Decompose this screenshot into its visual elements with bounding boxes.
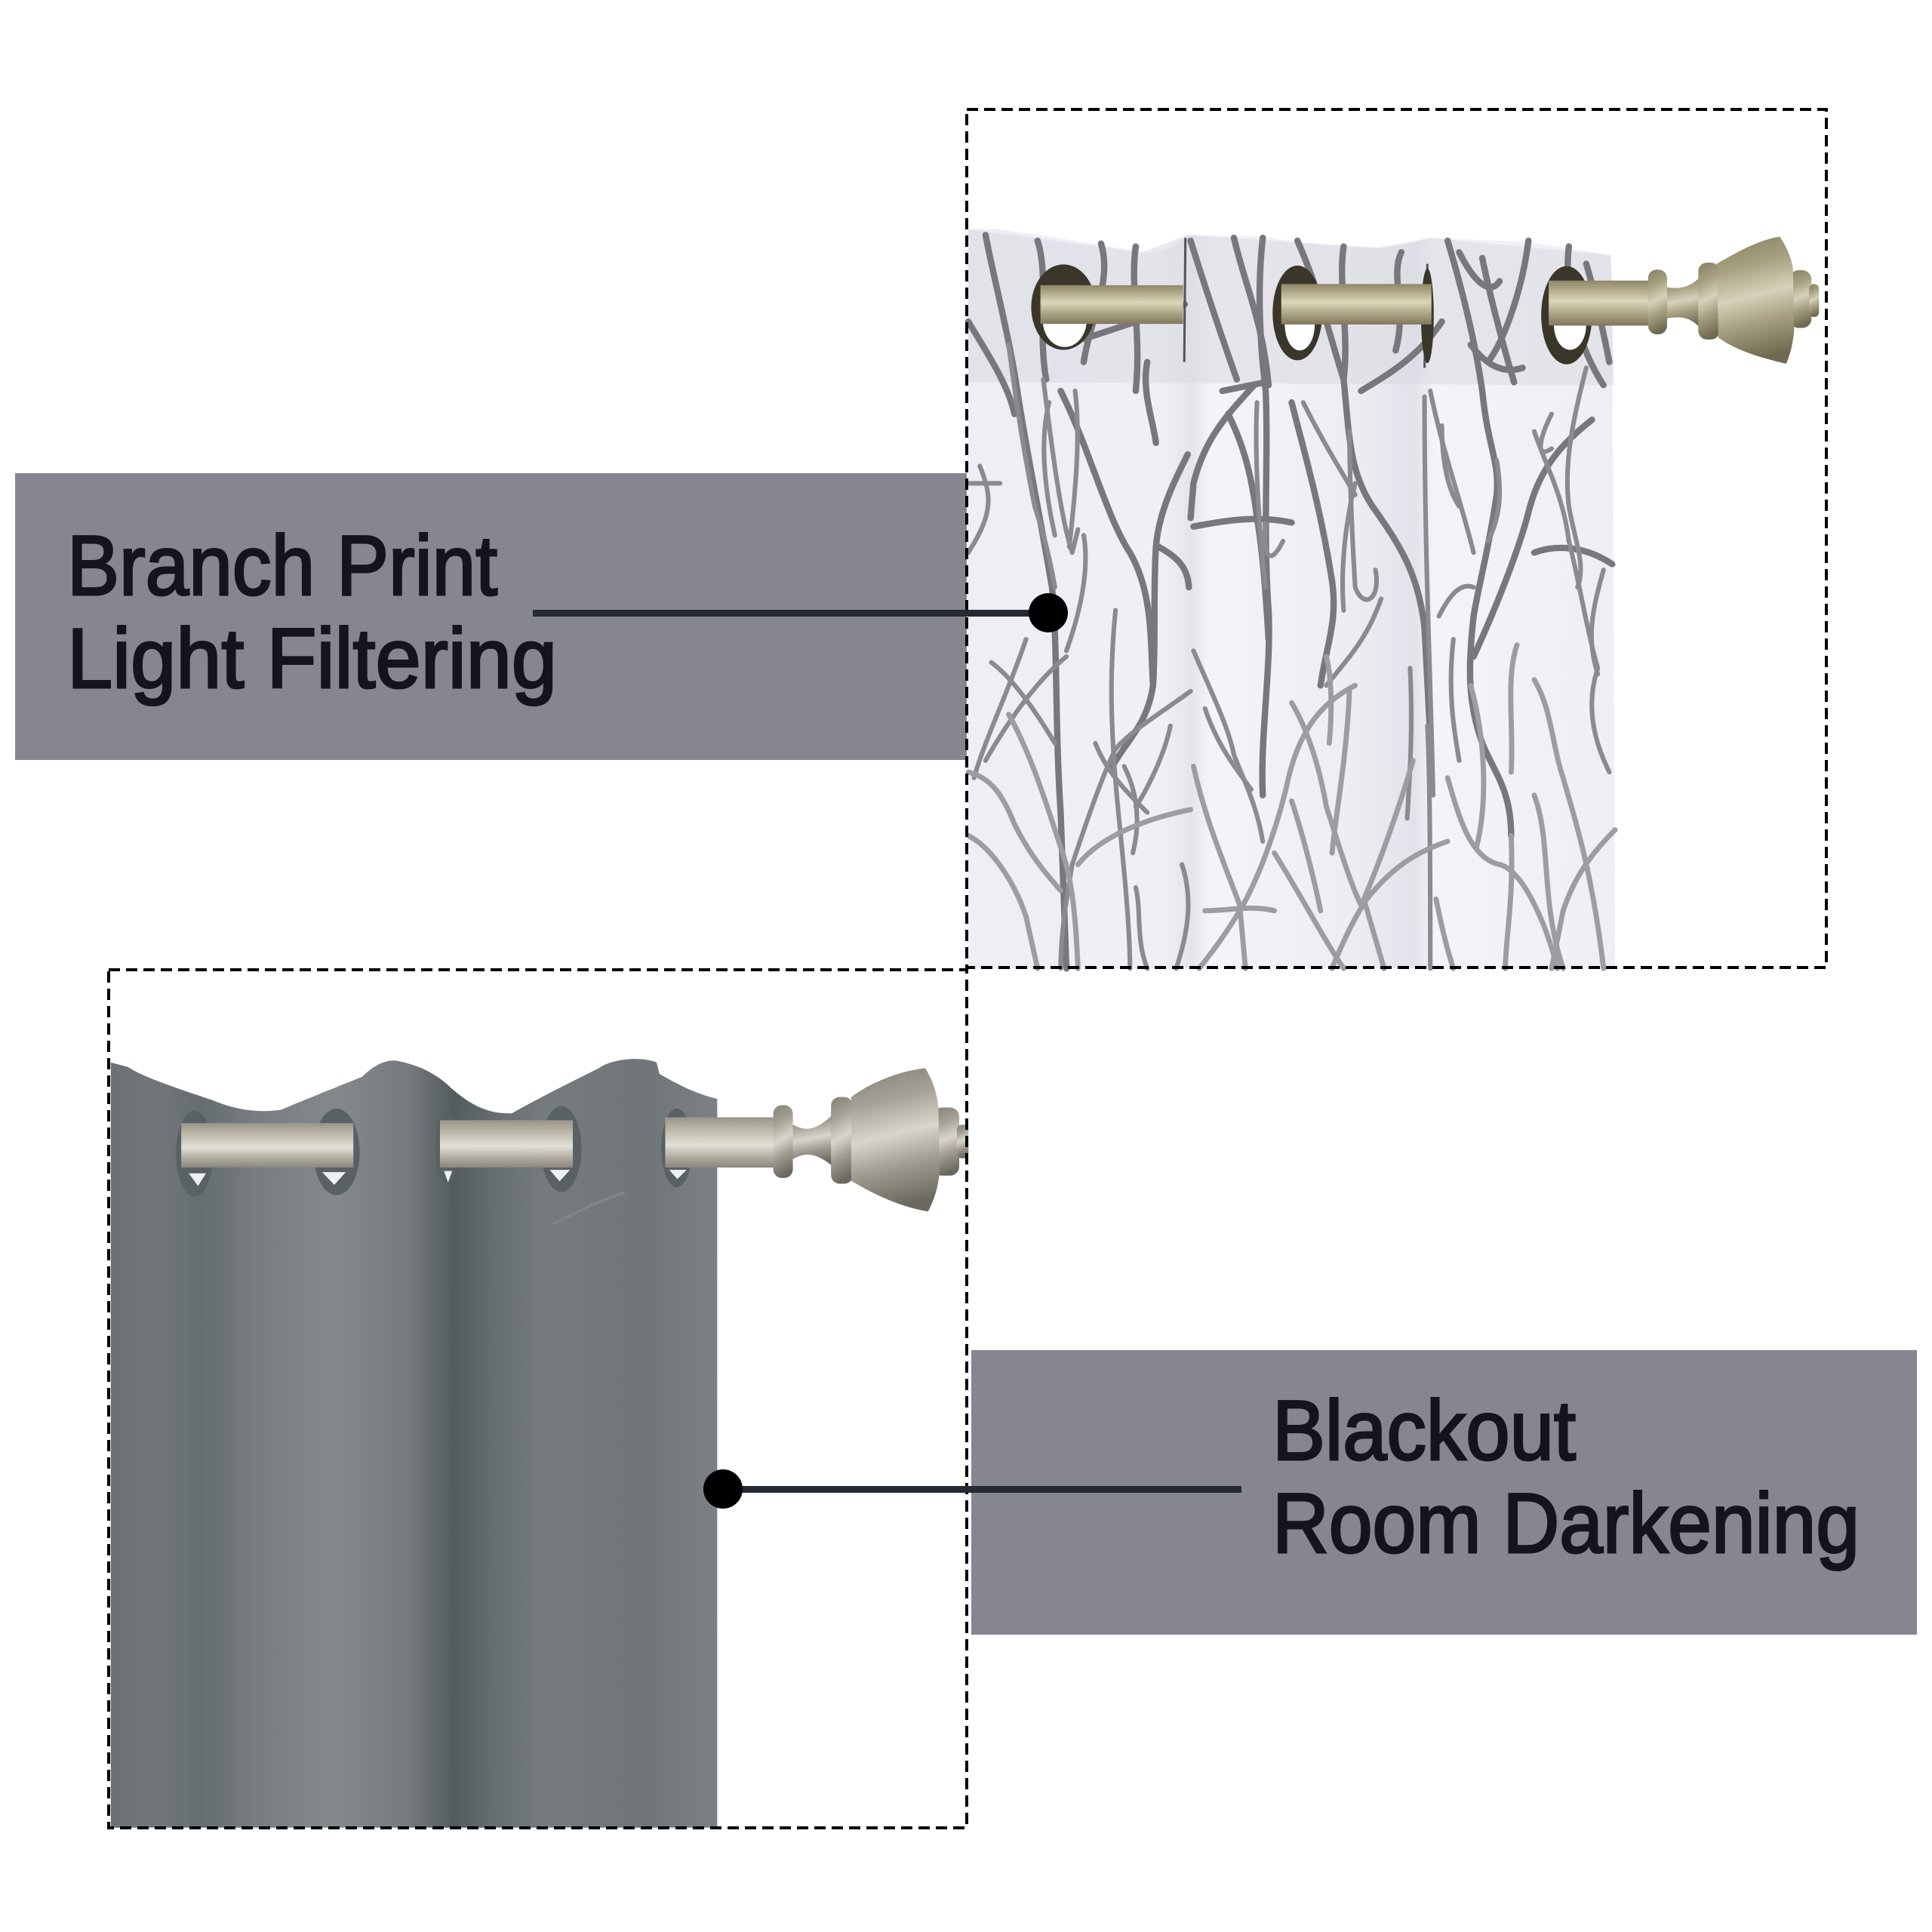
text: Blackout: Blackout [1272,1383,1576,1478]
curtain fabric [111,1059,717,1828]
grommets [1031,264,1592,365]
dashed frame: top box [967,109,1826,968]
gold rod segments [1041,285,1183,324]
crease near last grommet [552,1192,625,1224]
dashed frame: bottom box [109,970,967,1828]
text: Light Filtering: Light Filtering [67,611,557,706]
text: Branch Print: Branch Print [67,518,497,613]
curtain fabric [968,229,1615,968]
panel: blackout label [971,1350,1917,1635]
grommet openings [176,1106,692,1196]
light through openings [189,1170,687,1186]
header band shading [968,229,1614,385]
silver finial [774,1068,968,1211]
silver rod segments [181,1123,353,1168]
branch pattern [968,235,1615,968]
image: sheer branch print curtain on gold rod [968,229,1819,968]
callout: blackout leader and dot [703,1469,1241,1509]
panel: branch print label [15,473,967,760]
gold finial [1648,237,1819,364]
seams [1184,238,1427,368]
text: Room Darkening: Room Darkening [1272,1476,1860,1571]
callout: branch print leader and dot [533,593,1068,632]
image: grey blackout curtain on silver rod [111,1059,968,1828]
